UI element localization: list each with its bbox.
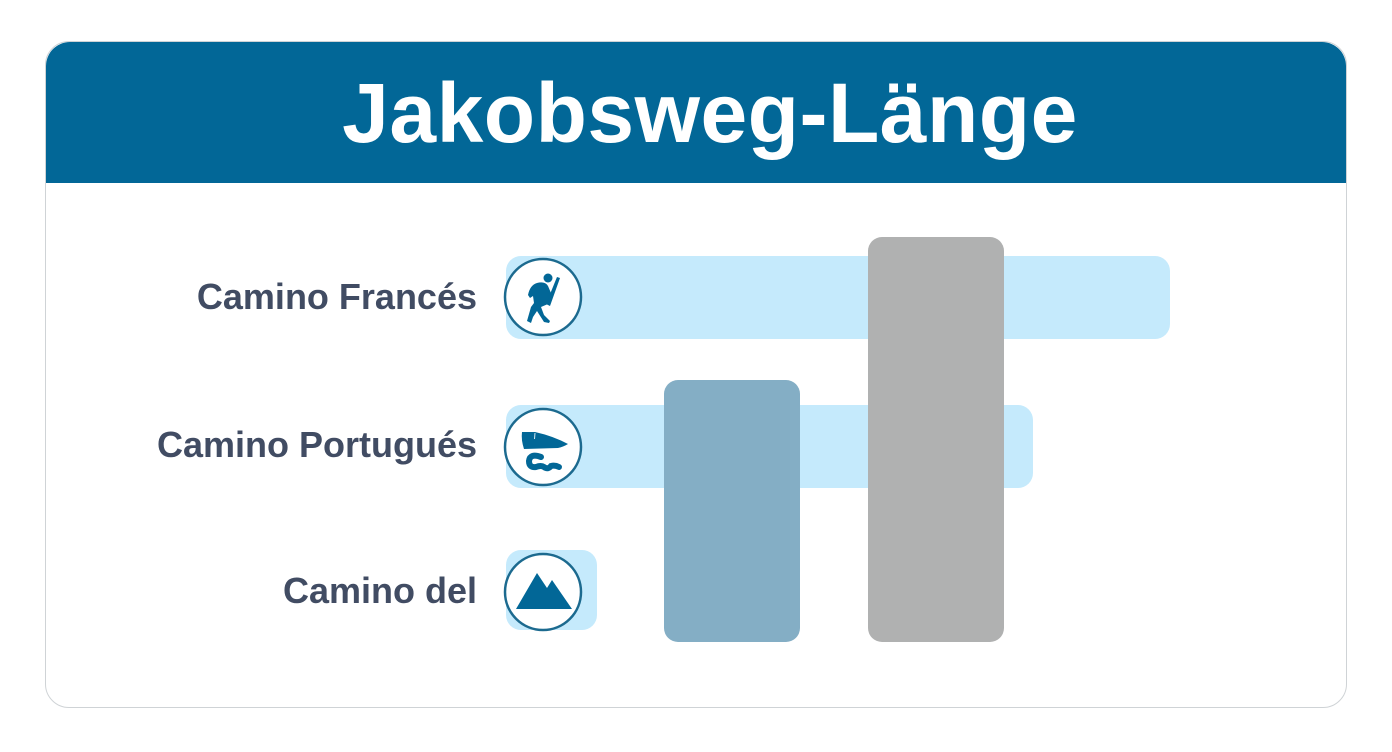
column: blue — [664, 380, 800, 642]
icon: mountains — [504, 552, 582, 632]
title: Jakobsweg-Länge — [342, 66, 1078, 160]
label: Camino Francés: Camino Francés — [197, 276, 477, 317]
column: grey — [868, 237, 1004, 642]
bar: Camino Francés — [506, 256, 1170, 339]
bar: Camino del — [506, 550, 597, 630]
title banner — [46, 42, 1346, 183]
icon: boat and wave — [504, 408, 582, 486]
icon: pilgrim — [504, 258, 582, 336]
label: Camino del: Camino del — [283, 570, 477, 611]
bar: Camino Portugués — [506, 405, 1033, 488]
label: Camino Portugués: Camino Portugués — [157, 424, 477, 465]
